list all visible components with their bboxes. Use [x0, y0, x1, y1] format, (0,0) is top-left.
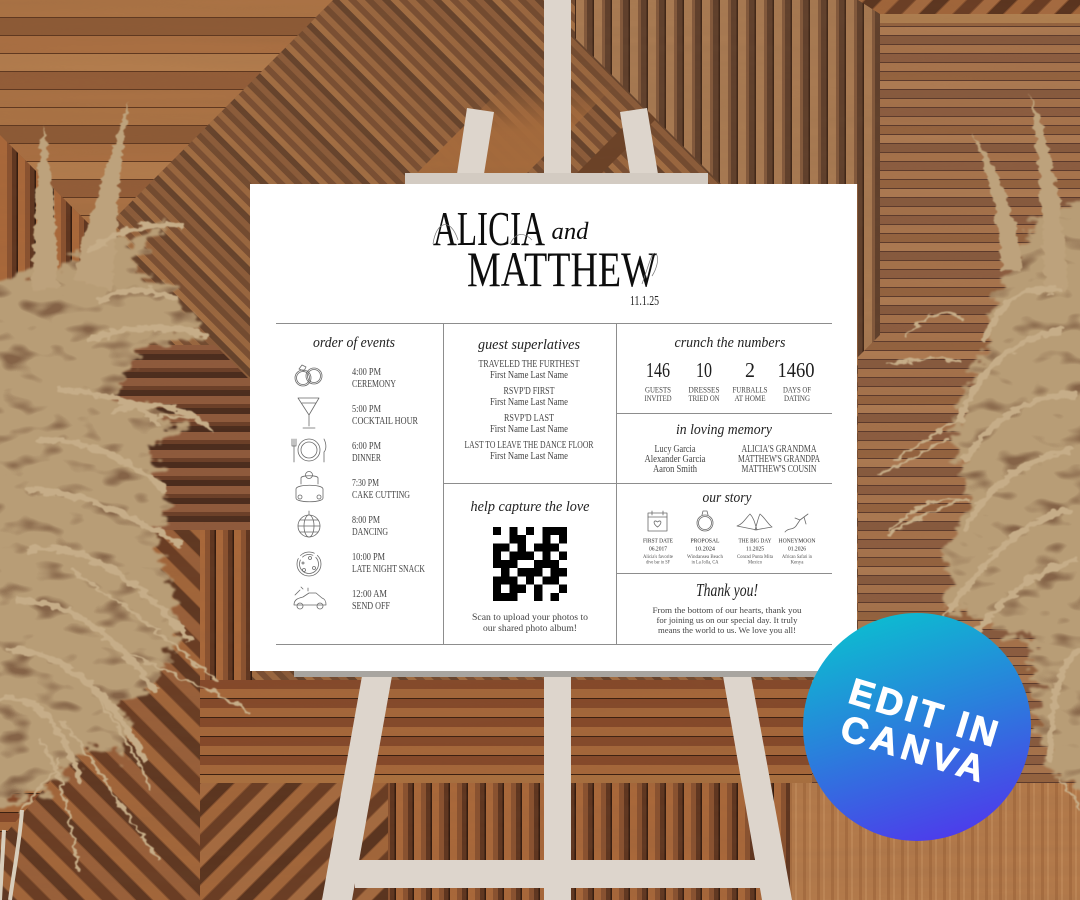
- heading: guest superlatives: guest superlatives: [478, 337, 580, 353]
- heading: in loving memory: in loving memory: [676, 422, 772, 438]
- milestone details: Kenya: [790, 560, 804, 566]
- superlatives list: First Name Last Name: [490, 424, 568, 435]
- panel: thank you: [652, 580, 802, 635]
- title: 11.1.25: [630, 294, 659, 309]
- panel: help capture the love: [470, 499, 590, 634]
- heading: help capture the love: help capture the love: [470, 499, 590, 515]
- sign board: [250, 184, 857, 671]
- statistic labels: [644, 386, 811, 403]
- milestones: [643, 538, 816, 552]
- memorial names: MATTHEW'S GRANDPA: [738, 454, 821, 465]
- milestones: 06.2017: [649, 546, 668, 552]
- statistics: 1460: [778, 358, 814, 382]
- icon: calendar: [648, 511, 667, 531]
- schedule list: 8:00 PM: [352, 515, 380, 526]
- icon: engagement ring: [697, 511, 713, 531]
- statistics: 10: [696, 358, 712, 382]
- schedule list: SEND OFF: [352, 601, 390, 612]
- heading: our story: our story: [702, 490, 752, 506]
- schedule list: [352, 367, 426, 612]
- panel: order of events: [292, 335, 426, 612]
- heading: order of events: order of events: [313, 335, 395, 351]
- milestones: 01.2026: [788, 546, 807, 552]
- sign shelf shadow: [294, 671, 857, 677]
- title: ALICIA: [433, 201, 545, 256]
- schedule list: DINNER: [352, 453, 381, 464]
- milestone details: in La Jolla, CA: [692, 560, 719, 566]
- title: [433, 201, 659, 309]
- panel: in loving memory: [644, 422, 821, 475]
- thank you message: means the world to us. We love you all!: [658, 625, 796, 635]
- QR caption: [472, 613, 588, 634]
- superlatives list: First Name Last Name: [490, 370, 568, 381]
- pampas grass: left: [0, 100, 248, 900]
- superlatives list: TRAVELED THE FURTHEST: [478, 359, 580, 370]
- statistic labels: AT HOME: [734, 394, 766, 403]
- milestone details: African Safari in: [782, 555, 813, 560]
- superlatives list: RSVP'D FIRST: [504, 386, 554, 397]
- icon: rings: [295, 365, 322, 386]
- schedule list: 4:00 PM: [352, 367, 381, 378]
- schedule list: LATE NIGHT SNACK: [352, 564, 426, 575]
- schedule list: 10:00 PM: [352, 552, 385, 563]
- icon: cake: [296, 472, 323, 502]
- milestone details: Mexico: [748, 560, 763, 566]
- statistic labels: TRIED ON: [688, 394, 720, 403]
- schedule list: DANCING: [352, 527, 388, 538]
- pampas grass: right: [878, 92, 1080, 815]
- schedule list: 6:00 PM: [352, 441, 381, 452]
- pampas stems: [0, 810, 22, 900]
- title: and: [552, 219, 590, 245]
- schedule list: 7:30 PM: [352, 478, 379, 489]
- icon: martini: [298, 398, 319, 428]
- icon: disco ball: [298, 511, 320, 537]
- icon: plate and cutlery: [292, 439, 326, 462]
- superlatives list: First Name Last Name: [490, 451, 568, 462]
- milestones: THE BIG DAY: [738, 538, 772, 544]
- superlatives list: [464, 359, 594, 462]
- schedule list: CEREMONY: [352, 379, 396, 390]
- milestones: HONEYMOON: [778, 538, 816, 544]
- panel: our story: [643, 490, 816, 566]
- memorial names: [644, 444, 821, 475]
- memorial names: Aaron Smith: [653, 464, 697, 475]
- thank you message: From the bottom of our hearts, thank you: [652, 605, 802, 615]
- schedule list: CAKE CUTTING: [352, 490, 410, 501]
- milestone details: Alicia's favorite: [643, 555, 673, 560]
- title: MATTHEW: [467, 241, 658, 297]
- superlatives list: First Name Last Name: [490, 397, 568, 408]
- statistic labels: INVITED: [644, 394, 672, 403]
- statistic labels: DATING: [784, 394, 810, 403]
- statistics: 2: [745, 358, 755, 382]
- statistic labels: FURBALLS: [732, 386, 768, 394]
- heading: crunch the numbers: crunch the numbers: [674, 335, 786, 351]
- icon: car: [294, 587, 326, 609]
- statistic labels: DAYS OF: [783, 386, 811, 394]
- thank you message: [652, 605, 802, 635]
- panel: guest superlatives: [464, 337, 594, 462]
- icon: wedding bells: [737, 514, 772, 530]
- schedule list: COCKTAIL HOUR: [352, 416, 418, 427]
- memorial names: MATTHEW'S COUSIN: [742, 464, 816, 475]
- statistics: [646, 358, 814, 382]
- superlatives list: LAST TO LEAVE THE DANCE FLOOR: [464, 440, 594, 451]
- memorial names: ALICIA'S GRANDMA: [742, 444, 817, 455]
- statistic labels: GUESTS: [645, 386, 671, 394]
- icon: airplane: [785, 514, 808, 532]
- memorial names: Lucy Garcia: [654, 444, 696, 455]
- milestone details: Conrad Punta Mita: [737, 555, 774, 560]
- milestones: PROPOSAL: [690, 538, 720, 544]
- milestones: 10.2024: [695, 546, 716, 552]
- heading: thank you: Thank you!: [696, 580, 758, 600]
- grid lines: [276, 323, 832, 645]
- milestone details: [643, 555, 813, 566]
- QR caption: Scan to upload your photos to: [472, 613, 588, 623]
- panel: crunch the numbers: [644, 335, 814, 403]
- milestone details: dive bar in SF: [646, 560, 670, 566]
- badge text: canva: CANVA: [836, 707, 989, 790]
- milestones: FIRST DATE: [643, 538, 673, 544]
- milestone details: Windansea Beach: [687, 555, 724, 560]
- milestones: 11.2025: [746, 546, 764, 552]
- thank you message: for joining us on our special day. It truly: [656, 615, 798, 625]
- icon: pizza: [297, 552, 321, 576]
- QR caption: our shared photo album!: [483, 624, 577, 634]
- superlatives list: RSVP'D LAST: [504, 413, 554, 424]
- QR code: [493, 527, 567, 601]
- easel: [322, 0, 792, 900]
- memorial names: Alexander Garcia: [644, 454, 706, 465]
- badge: edit in canva: [803, 613, 1031, 841]
- statistic labels: DRESSES: [688, 386, 720, 394]
- schedule list: 12:00 AM: [352, 589, 387, 600]
- badge text: edit in: EDIT IN: [844, 671, 1003, 755]
- schedule list: 5:00 PM: [352, 404, 381, 415]
- statistics: 146: [646, 358, 670, 382]
